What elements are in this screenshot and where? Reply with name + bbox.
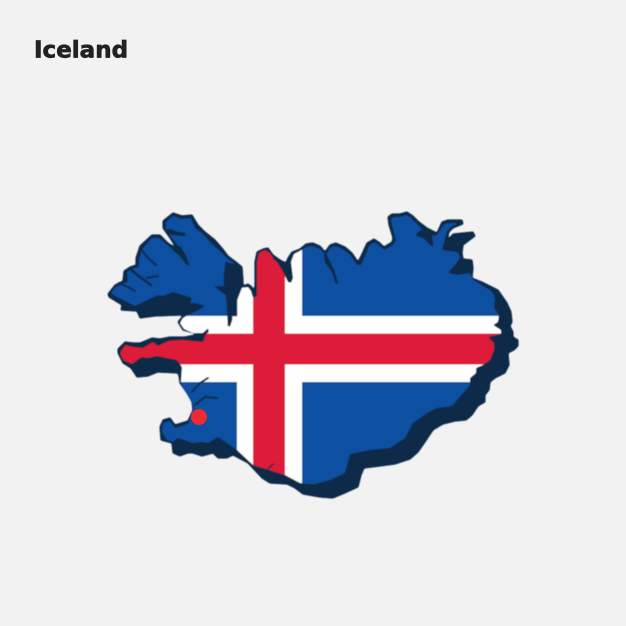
title: Iceland: [34, 38, 128, 64]
capital city marker: [191, 409, 207, 425]
dark coastline silhouette: [108, 212, 518, 498]
map of Iceland: [100, 200, 530, 500]
flag fill clipped to land: [111, 214, 502, 485]
fjord shadows: [119, 228, 433, 470]
